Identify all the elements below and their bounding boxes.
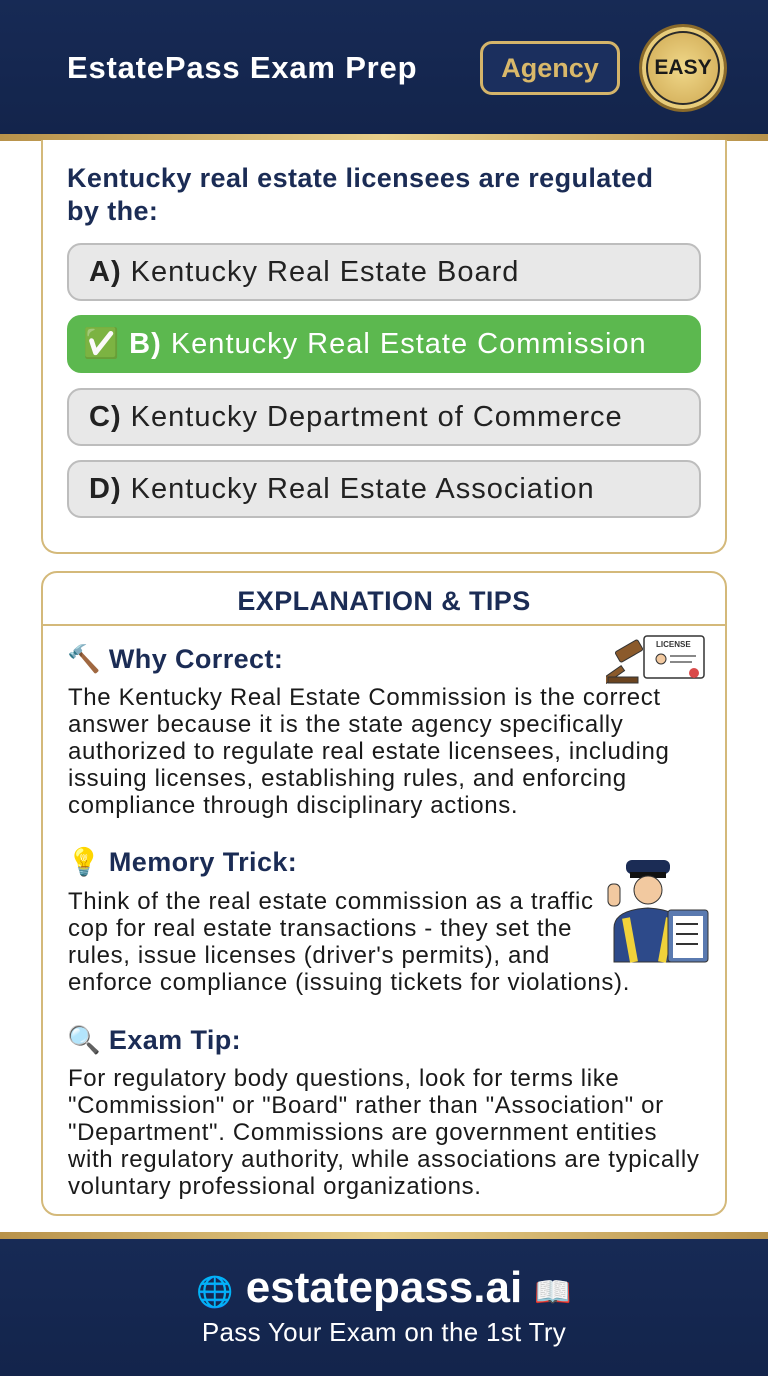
text: memory trick: rules, issue licenses (driver's permits), and (68, 942, 550, 969)
question text: by the: (67, 196, 158, 226)
header (0, 0, 768, 136)
badge: Agency (480, 41, 620, 95)
text: why correct: answer because it is the state agency specifically (68, 711, 623, 738)
text: why correct: The Kentucky Real Estate Commission is the correct (68, 684, 661, 711)
text: why correct: issuing licenses, establishing rules, and enforcing (68, 765, 627, 792)
text: memory trick: cop for real estate transactions - they set the (68, 915, 572, 942)
text: why correct: compliance through disciplinary actions. (68, 792, 518, 819)
text: memory trick (68, 888, 630, 996)
question text (67, 163, 653, 226)
icon: gavel license (606, 635, 705, 684)
badge: EASY (639, 24, 727, 112)
badge: EASY: EASY (654, 56, 712, 79)
footer brand: 🌐 estatepass.ai 📖 (196, 1263, 572, 1312)
text: exam tip: "Department". Commissions are government entities (68, 1119, 657, 1146)
text: exam tip: "Commission" or "Board" rather than "Association" or (68, 1092, 664, 1119)
option D (67, 460, 701, 518)
option B correct: ✅ B) Kentucky Real Estate Commission (83, 328, 647, 360)
heading: exam tip: 🔍 Exam Tip: (67, 1025, 241, 1055)
footer (0, 1239, 768, 1376)
text: memory trick: Think of the real estate commission as a traffic (68, 888, 594, 915)
panel: question (41, 140, 727, 554)
icon: traffic cop (608, 860, 708, 963)
panel: explanation (41, 571, 727, 1216)
text: exam tip: For regulatory body questions, look for terms like (68, 1065, 619, 1092)
question text: Kentucky real estate licensees are regulated (67, 163, 653, 193)
icon: gavel license: LICENSE (656, 640, 691, 649)
text: exam tip (68, 1065, 700, 1200)
text: memory trick: enforce compliance (issuing tickets for violations). (68, 969, 630, 996)
option C (67, 388, 701, 446)
explanation heading: EXPLANATION & TIPS (237, 586, 531, 616)
text: why correct (68, 684, 669, 819)
heading: memory trick: 💡 Memory Trick: (67, 847, 297, 877)
heading: why correct: 🔨 Why Correct: (67, 644, 283, 674)
option A (67, 243, 701, 301)
option C: C) Kentucky Department of Commerce (89, 401, 623, 433)
explanation heading (43, 573, 725, 626)
option B correct (67, 315, 701, 373)
tagline: Pass Your Exam on the 1st Try (202, 1317, 566, 1347)
option D: D) Kentucky Real Estate Association (89, 473, 595, 505)
text: why correct: authorized to regulate real estate licensees, including (68, 738, 669, 765)
option A: A) Kentucky Real Estate Board (89, 256, 519, 288)
badge: Agency: Agency (501, 53, 599, 83)
text: exam tip: with regulatory authority, while associations are typically (68, 1146, 700, 1173)
text: exam tip: voluntary professional organizations. (68, 1173, 482, 1200)
title: EstatePass Exam Prep (67, 50, 417, 85)
